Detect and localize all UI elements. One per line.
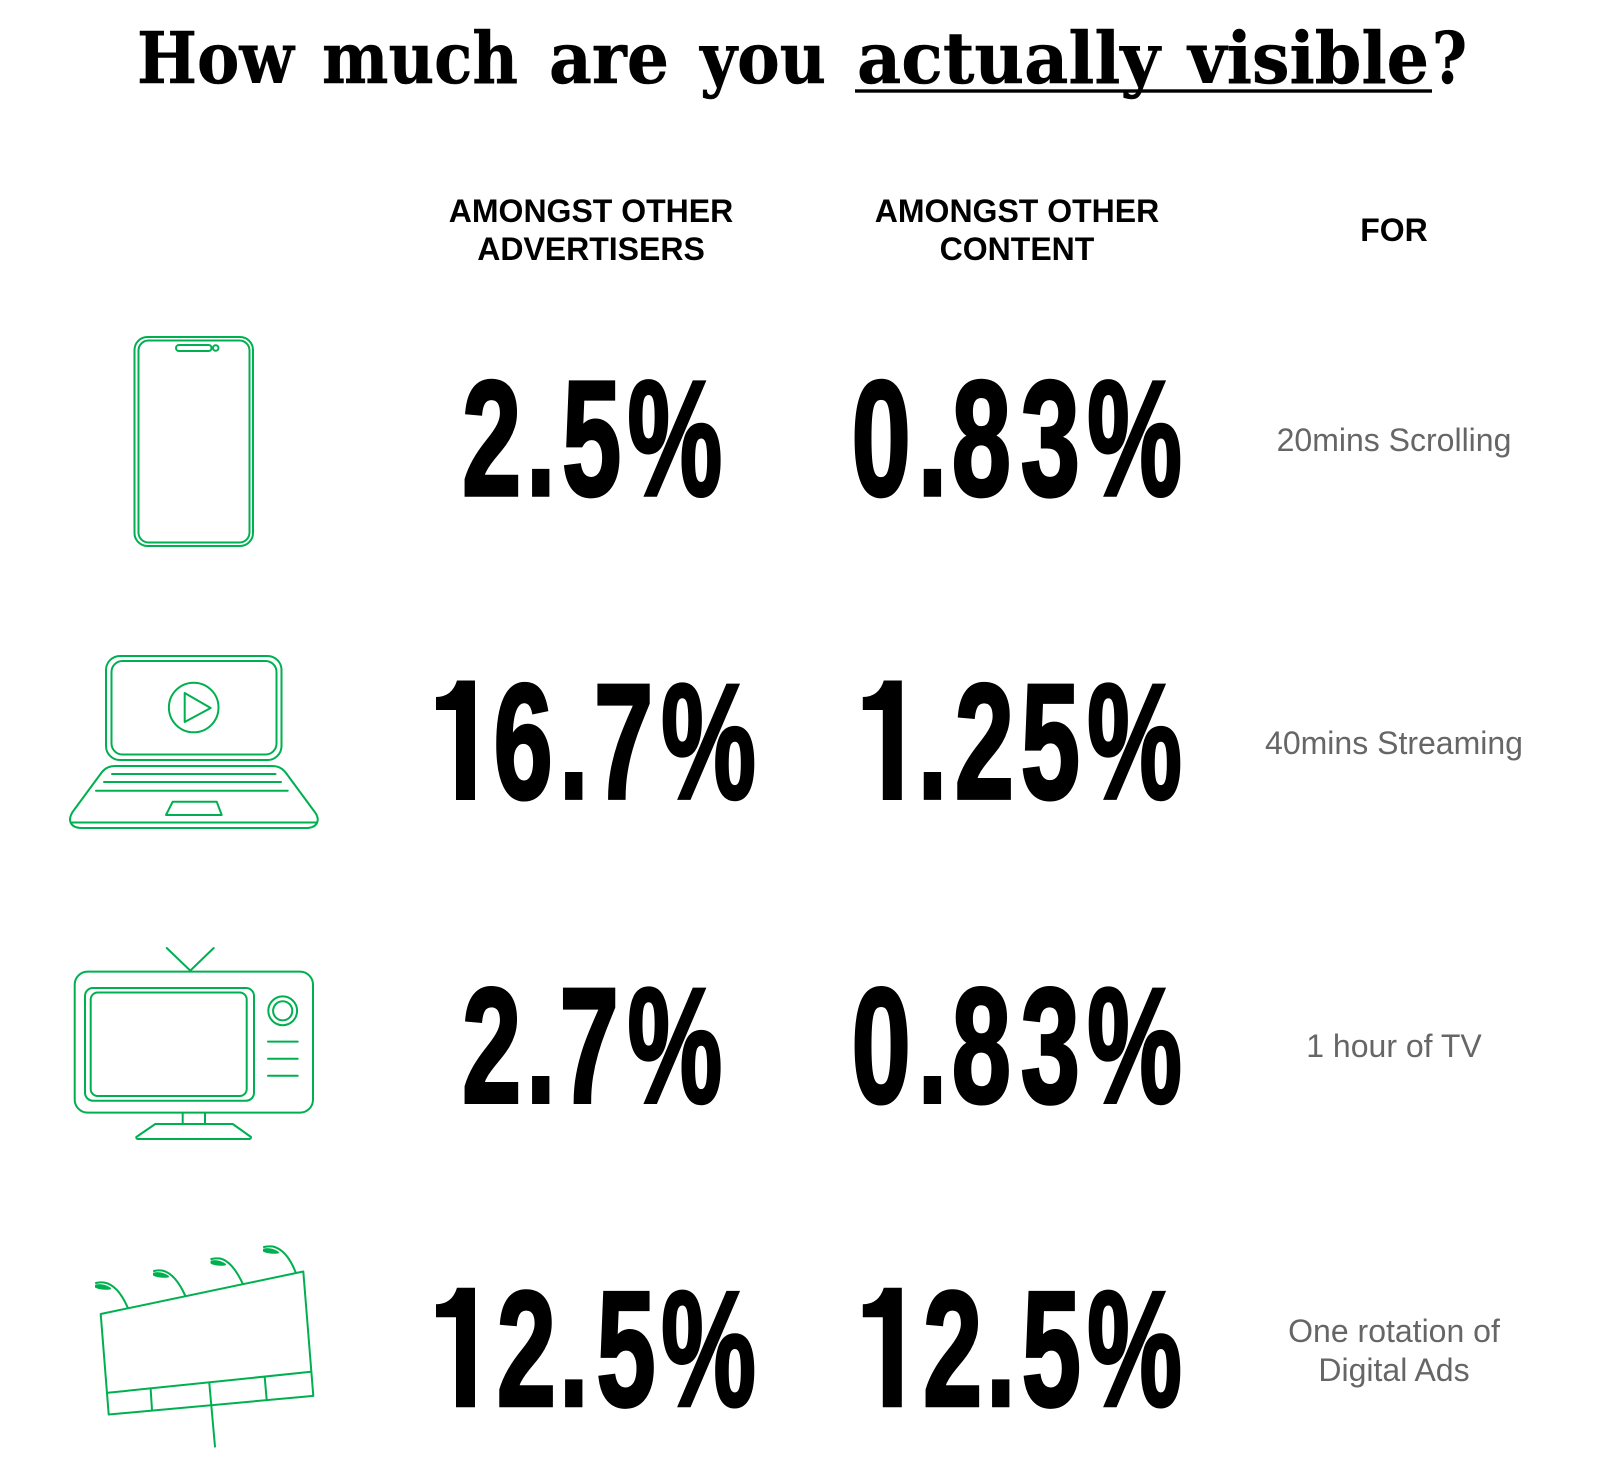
title: you	[699, 16, 826, 100]
column header: amongst other advertisers: AMONGST OTHER	[449, 193, 733, 229]
title: How	[137, 16, 296, 100]
stat: billboard amongst advertisers: 12.5%	[430, 1258, 756, 1441]
stat: smartphone amongst content: 0.83%	[852, 348, 1182, 531]
title: ?	[1432, 16, 1467, 100]
label: 1 hour of tv: 1 hour of TV	[1306, 1028, 1482, 1064]
stat: television amongst advertisers: 2.7%	[462, 955, 722, 1138]
title: actually	[857, 16, 1162, 100]
icon: billboard	[96, 1246, 313, 1447]
label: one rotation of digital ads	[1288, 1313, 1500, 1388]
title: much	[322, 16, 518, 100]
title: are	[549, 16, 669, 100]
stat: laptop amongst advertisers: 16.7%	[430, 651, 756, 834]
stat: laptop amongst content: 1.25%	[857, 651, 1182, 834]
stat: smartphone amongst advertisers: 2.5%	[462, 348, 722, 531]
stat: billboard amongst content: 12.5%	[857, 1258, 1182, 1441]
icon: television	[75, 948, 313, 1139]
stat: television amongst content: 0.83%	[852, 955, 1182, 1138]
column header: amongst other advertisers	[449, 193, 733, 267]
column header: for: FOR	[1360, 212, 1428, 248]
label: one rotation of digital ads: One rotation of	[1288, 1313, 1500, 1349]
label: one rotation of digital ads: Digital Ads	[1318, 1352, 1470, 1388]
label: 20mins scrolling: 20mins Scrolling	[1277, 422, 1511, 458]
title: visible	[1186, 16, 1429, 100]
column header: amongst other content: CONTENT	[940, 231, 1095, 267]
column header: amongst other advertisers: ADVERTISERS	[477, 231, 705, 267]
title	[137, 16, 1467, 100]
label: 40mins streaming: 40mins Streaming	[1265, 725, 1523, 761]
column header: amongst other content	[875, 193, 1159, 267]
icon: smartphone	[134, 337, 253, 546]
column header: amongst other content: AMONGST OTHER	[875, 193, 1159, 229]
icon: laptop with play button	[70, 656, 318, 828]
